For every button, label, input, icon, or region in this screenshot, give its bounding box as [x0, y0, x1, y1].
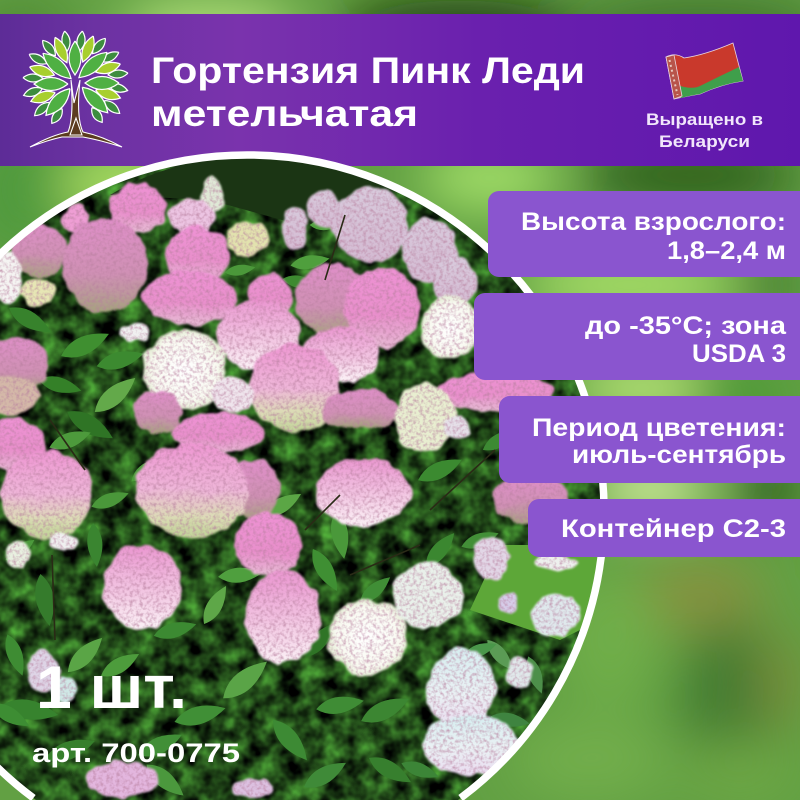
panel: height [488, 191, 800, 277]
article number: арт. 700-0775 [32, 738, 240, 768]
logo: tree [22, 31, 129, 147]
panel: hardiness [474, 293, 800, 380]
hydrangea photo in circle [0, 148, 620, 800]
panel: bloom period: Период цветения: [532, 414, 786, 442]
tree trunk [30, 80, 122, 147]
panel: bloom period [499, 396, 800, 483]
grown in Belarus label [646, 110, 763, 151]
grown in Belarus label: Выращено в [646, 110, 763, 129]
panel: bloom period: июль-сентябрь [572, 441, 786, 469]
tree foliage [22, 31, 129, 126]
flower stems [50, 215, 495, 640]
panel: height: Высота взрослого: [521, 208, 786, 236]
grown in Belarus label: Беларуси [659, 132, 750, 151]
header band [0, 14, 800, 166]
title: Гортензия Пинк Леди [151, 50, 585, 91]
title [151, 50, 585, 134]
panel: height: 1,8–2,4 м [667, 237, 786, 265]
icon: Belarus flag [666, 43, 743, 99]
grass patch [470, 545, 600, 640]
panel: container: Контейнер С2-3 [561, 515, 786, 543]
flower clusters [0, 179, 580, 798]
quantity: 1 шт. [36, 654, 187, 721]
leaves [0, 220, 548, 800]
panel: container [528, 499, 800, 557]
white circle ring [0, 155, 604, 798]
dark top trees [110, 158, 388, 222]
title: метельчатая [151, 93, 418, 134]
foliage backdrop [0, 150, 620, 800]
panel: hardiness: USDA 3 [692, 340, 786, 368]
panel: hardiness: до -35°C; зона [585, 312, 787, 340]
